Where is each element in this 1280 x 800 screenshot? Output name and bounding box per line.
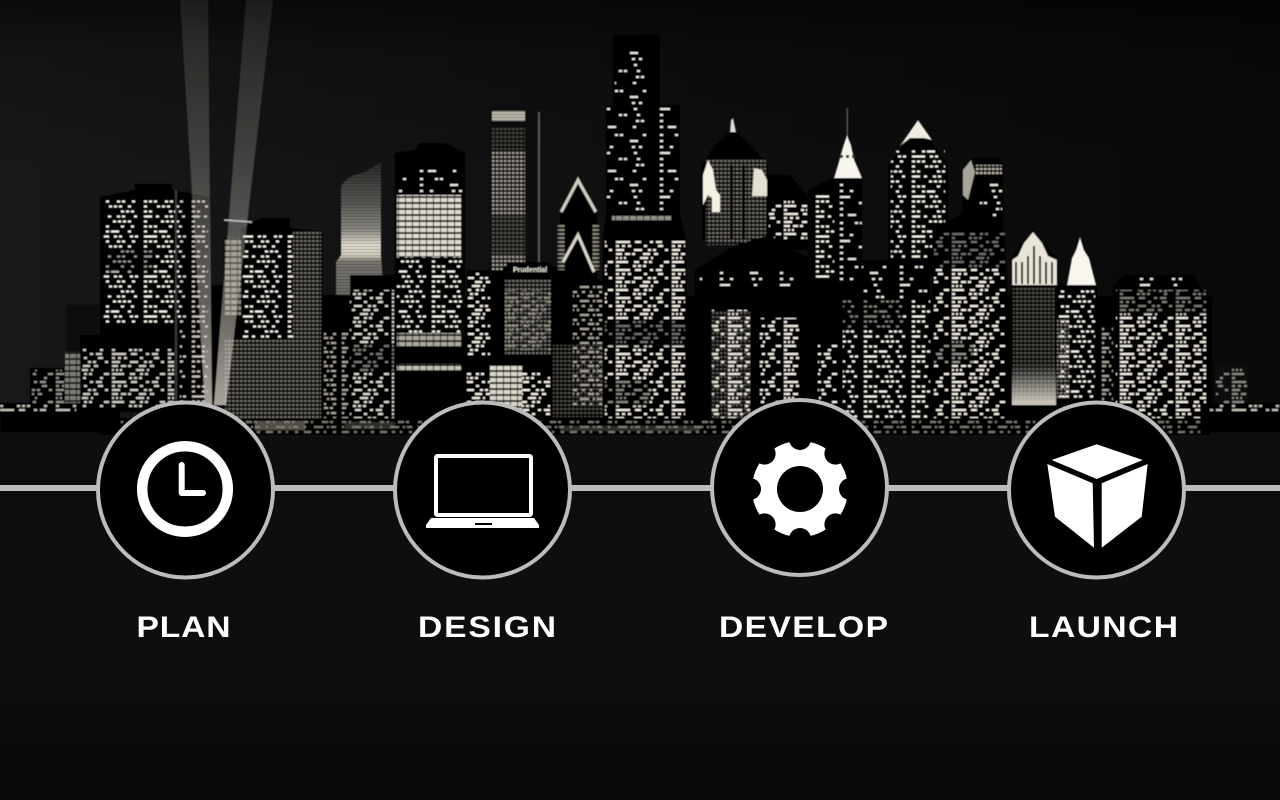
building: small blocks	[1097, 320, 1115, 410]
step: launch	[1009, 402, 1184, 644]
searchlight beams	[180, 0, 273, 405]
building: Prudential block	[467, 262, 575, 362]
building: right rounded tower	[1113, 275, 1212, 420]
building: chevron top tower	[560, 175, 597, 285]
building: setback tower behind	[962, 158, 1003, 225]
icon: gear	[739, 428, 861, 550]
building: left tower	[80, 184, 210, 412]
icon: laptop	[426, 456, 539, 528]
unlit facade shadows	[104, 232, 1206, 406]
building: narrow block beside tallest tower	[552, 280, 607, 420]
circle badge: design	[395, 402, 570, 578]
label: develop: DEVELOP	[719, 610, 888, 644]
building: white spire tower	[1057, 237, 1097, 400]
building: banded tower	[932, 200, 1008, 420]
dark mass behind buildings	[322, 296, 1212, 422]
building: pyramid top tower	[888, 120, 948, 275]
building: art deco tower	[702, 118, 768, 245]
circle badge: develop	[712, 400, 887, 575]
building: far right low blocks	[1200, 365, 1280, 432]
shoreline lights	[100, 418, 1210, 435]
step: develop	[712, 400, 888, 644]
building: mid block right of centre	[815, 260, 930, 423]
building: tower with lit bands	[768, 175, 808, 250]
building: dark block with window columns	[695, 235, 815, 425]
step: plan	[98, 402, 273, 644]
building: far left low blocks	[0, 305, 120, 432]
label: launch: LAUNCH	[1029, 610, 1178, 644]
icon: cube	[1047, 444, 1148, 548]
building: curved glass tower	[336, 162, 384, 296]
building: gothic white crown tower	[1012, 230, 1057, 405]
label: plan: PLAN	[136, 610, 230, 644]
circle badge: launch	[1009, 402, 1184, 578]
building: slim tower with lit crown	[491, 108, 541, 280]
building: low lit block	[465, 355, 552, 420]
building: second tower	[210, 218, 322, 420]
building: Prudential block: Prudential	[513, 267, 547, 274]
building: spire tower with white crown	[808, 108, 862, 295]
building: low blocks beside central tower	[322, 275, 396, 420]
label: design: DESIGN	[418, 610, 556, 644]
building: tallest tower	[603, 35, 686, 420]
step: design	[395, 402, 570, 644]
building: central bright tower	[395, 143, 465, 420]
city skyline photo	[0, 0, 1280, 435]
icon: clock	[142, 446, 228, 532]
connecting timeline line	[0, 485, 1280, 491]
circle badge: plan	[98, 402, 273, 578]
